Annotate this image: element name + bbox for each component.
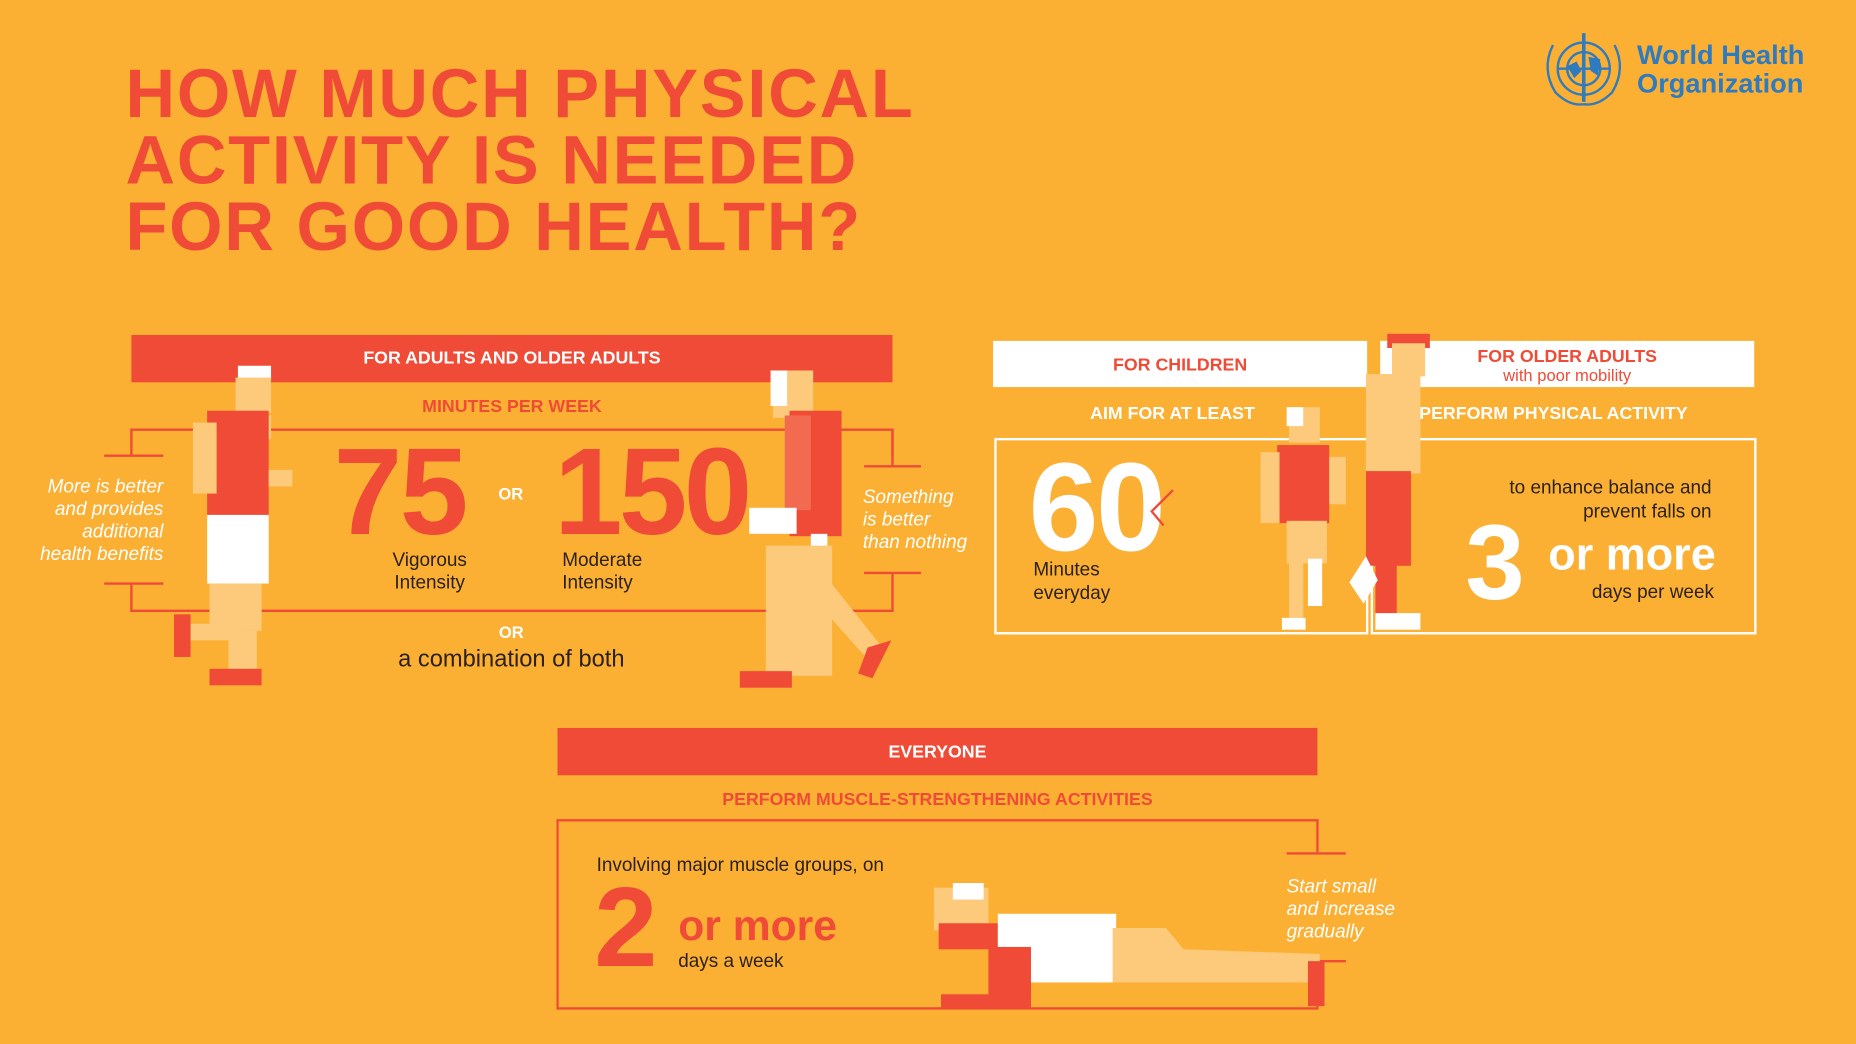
subheading: aim for at least: AIM FOR AT LEAST [1090, 404, 1255, 424]
stat: 3 or more: or more [1548, 530, 1716, 580]
text: more is better: health benefits [40, 544, 163, 565]
stat: 2 or more: 2 [594, 864, 657, 991]
banner: everyone: EVERYONE [888, 742, 986, 762]
WHO logo [1546, 33, 1804, 106]
subheading: perform physical activity: PERFORM PHYSICAL ACTIVITY [1419, 404, 1688, 424]
header: for children [993, 341, 1367, 387]
stat: 150 moderate: Intensity [562, 573, 633, 593]
icon: WHO emblem [1546, 33, 1622, 106]
WHO name: Organization [1637, 67, 1803, 98]
title: FOR GOOD HEALTH? [125, 188, 862, 265]
stat: 60 minutes: Minutes [1033, 560, 1100, 580]
banner: adults: FOR ADULTS AND OLDER ADULTS [363, 348, 661, 368]
text: more is better: More is better [48, 477, 163, 497]
stat: 3 or more: 3 [1465, 504, 1525, 623]
banner: adults [131, 335, 892, 382]
banner: everyone [558, 728, 1317, 775]
header: for children: FOR CHILDREN [1113, 355, 1247, 375]
header: for older adults [1380, 341, 1754, 387]
figure: walker [740, 370, 892, 688]
stat: 2 or more: days a week [678, 952, 784, 972]
text: more is better [40, 477, 164, 565]
or combination [398, 623, 625, 672]
stat: 75 vigorous: Vigorous [392, 550, 467, 571]
or combination: a combination of both [398, 646, 625, 672]
text: something is better [863, 488, 967, 553]
or combination: OR [499, 623, 524, 642]
title [125, 56, 915, 265]
title: ACTIVITY IS NEEDED [125, 122, 858, 199]
panel: children [993, 340, 1368, 634]
text: enhance balance: to enhance balance and [1509, 478, 1712, 498]
stat: 2 or more [594, 864, 837, 991]
figure: runner [174, 366, 292, 686]
panel: adults [40, 335, 967, 688]
stat: 3 or more: days per week [1592, 582, 1714, 602]
text: something is better: Something [863, 488, 953, 508]
text: involving major muscle groups: Involving major muscle groups, on [597, 856, 884, 876]
stat: 150 moderate: 150 [554, 424, 749, 561]
stat: 150 moderate: Moderate [562, 550, 642, 571]
header: for older adults: with poor mobility [1503, 366, 1631, 385]
subheading: muscle strengthening: PERFORM MUSCLE-STRENGTHENING ACTIVITIES [722, 790, 1153, 810]
panel: everyone [556, 728, 1395, 1010]
stat: 2 or more: or more [678, 901, 837, 949]
panel: older adults poor mobility [1349, 334, 1757, 634]
or: OR [498, 484, 523, 503]
header: for older adults: FOR OLDER ADULTS [1477, 347, 1657, 367]
text: something is better: is better [863, 510, 930, 530]
figure: child [1260, 407, 1346, 630]
stat: 60 minutes: 60 [1029, 438, 1163, 578]
WHO name [1637, 39, 1804, 98]
title: HOW MUCH PHYSICAL [125, 56, 915, 133]
stat: 3 or more [1465, 504, 1716, 623]
text: start small: gradually [1287, 922, 1364, 942]
stat: 75 vigorous: Intensity [394, 573, 465, 593]
text: enhance balance [1509, 478, 1712, 522]
stat: 60 minutes: everyday [1033, 584, 1110, 604]
subheading: minutes per week: MINUTES PER WEEK [422, 397, 602, 417]
text: start small: and increase [1287, 900, 1395, 920]
text: start small: Start small [1287, 877, 1376, 897]
figure: plank [934, 883, 1324, 1008]
WHO name: World Health [1637, 39, 1804, 70]
text: start small [1286, 877, 1395, 942]
text: more is better: and provides [55, 500, 163, 520]
text: something is better: than nothing [863, 533, 967, 553]
text: enhance balance: prevent falls on [1583, 502, 1712, 522]
figure: older adult [1349, 334, 1430, 630]
stat: 75 vigorous: 75 [334, 424, 466, 561]
text: more is better: additional [82, 522, 163, 542]
